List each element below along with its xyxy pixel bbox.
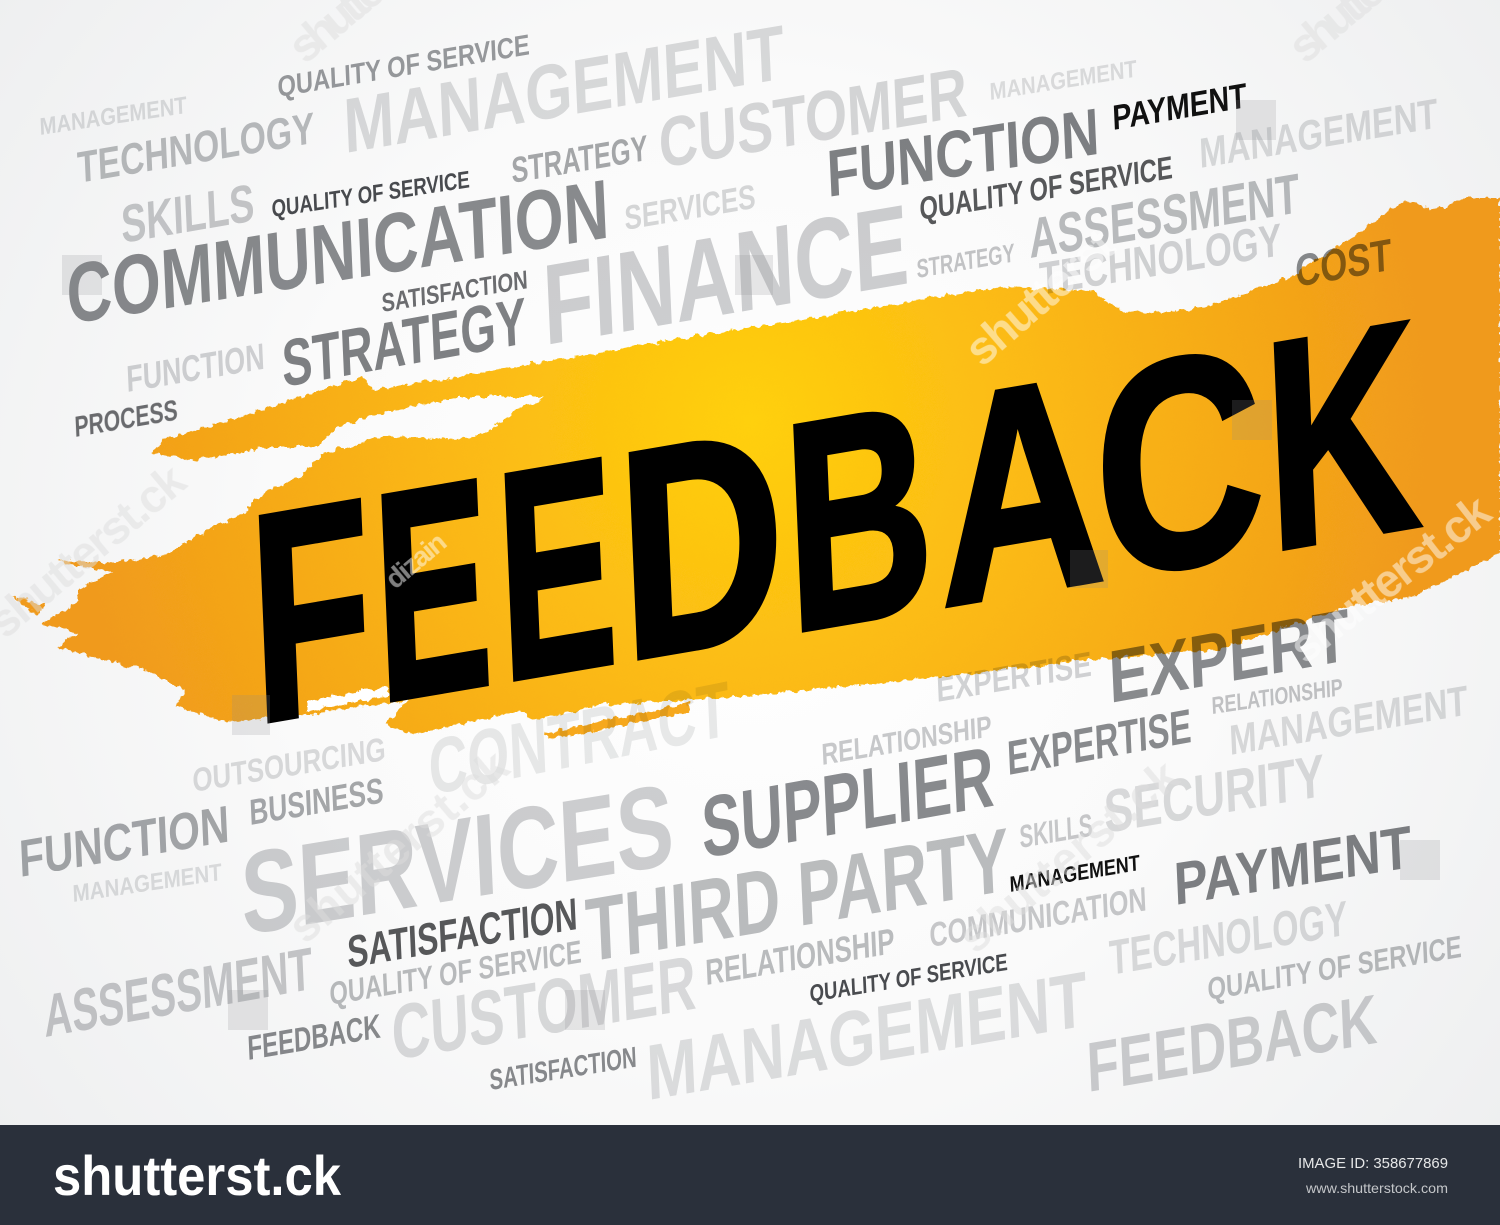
- word: satisfaction: SATISFACTION: [381, 264, 528, 318]
- watermark text: shutterst.ck: [278, 739, 519, 953]
- word: strategy large: STRATEGY: [280, 283, 528, 401]
- word: finance: FINANCE: [540, 181, 911, 370]
- main title: FEEDBACK: [245, 258, 1425, 787]
- main title: FEEDBACK: E: [492, 394, 622, 745]
- main title: FEEDBACK: D: [613, 366, 791, 724]
- word: communication: COMMUNICATION: [65, 161, 611, 342]
- word: function: FUNCTION: [825, 93, 1101, 211]
- word: management: MANAGEMENT: [39, 92, 188, 141]
- word: feedback lower right: FEEDBACK: [1085, 980, 1379, 1107]
- word: security: SECURITY: [1103, 742, 1326, 846]
- word: management dark: MANAGEMENT: [1009, 850, 1141, 897]
- word: payment: PAYMENT: [1112, 76, 1247, 138]
- word: skills: SKILLS: [120, 173, 256, 255]
- word: cost: COST: [1294, 229, 1392, 297]
- word: quality of service lower: QUALITY OF SERVICE: [329, 933, 582, 1012]
- watermark text: dizain: [379, 526, 452, 595]
- footer image id: IMAGE ID: 358677869: [1298, 1155, 1448, 1172]
- word: relationship lower: RELATIONSHIP: [705, 920, 895, 993]
- main title: FEEDBACK: A: [931, 311, 1110, 670]
- word: function left: FUNCTION: [126, 336, 265, 400]
- watermark text: shutterst.ck: [1279, 484, 1500, 673]
- word: services large: SERVICES: [238, 759, 676, 960]
- word: satisfaction dark: SATISFACTION: [346, 888, 578, 978]
- word: feedback small: FEEDBACK: [247, 1007, 382, 1068]
- word: technology: TECHNOLOGY: [76, 104, 315, 193]
- word: customer lower: CUSTOMER: [390, 939, 698, 1077]
- watermark stamps: [62, 100, 1440, 1030]
- word: technology right: TECHNOLOGY: [1038, 213, 1282, 305]
- word: technology lower: TECHNOLOGY: [1108, 892, 1348, 986]
- word cloud: upper words: [39, 9, 1439, 444]
- word: process: PROCESS: [74, 394, 178, 444]
- main title: FEEDBACK: F: [245, 436, 378, 787]
- word: third party: THIRD PARTY: [583, 810, 1011, 982]
- word: quality of service dark: QUALITY OF SERVICE: [271, 166, 470, 223]
- word: quality of service: QUALITY OF SERVICE: [277, 29, 530, 104]
- word: strategy small: STRATEGY: [916, 237, 1015, 284]
- watermark text: shutterst.ck: [948, 749, 1189, 963]
- word: customer: CUSTOMER: [657, 53, 969, 183]
- main title: FEEDBACK: C: [1089, 284, 1270, 643]
- orange brush stroke: [12, 197, 1500, 740]
- watermark text: shutterst: [954, 218, 1124, 376]
- footer bar: [0, 1125, 1500, 1225]
- word: skills small: SKILLS: [1019, 807, 1093, 855]
- word: communication small: COMMUNICATION: [929, 880, 1147, 955]
- word: quality of service dark lower: QUALITY OF SERVICE: [809, 949, 1008, 1008]
- word: management lower left: MANAGEMENT: [72, 859, 223, 908]
- main title: FEEDBACK: B: [779, 340, 939, 696]
- word: outsourcing: OUTSOURCING: [192, 730, 386, 799]
- word: function lower left: FUNCTION: [18, 795, 231, 889]
- footer logo: shutterst.ck: [53, 1144, 342, 1207]
- footer url: www.shutterstock.com: [1305, 1180, 1448, 1196]
- word: payment lower: PAYMENT: [1173, 813, 1413, 918]
- word: management upper right: MANAGEMENT: [989, 55, 1138, 106]
- word: management far right: MANAGEMENT: [1198, 89, 1439, 177]
- word: relationship: RELATIONSHIP: [821, 710, 992, 772]
- word: quality of service right: QUALITY OF SERVICE: [919, 149, 1173, 227]
- main title: FEEDBACK: K: [1259, 258, 1425, 614]
- main title: FEEDBACK: E: [369, 416, 497, 765]
- word: assessment lower: ASSESSMENT: [43, 935, 314, 1050]
- word: satisfaction bottom: SATISFACTION: [489, 1041, 637, 1097]
- word: business: BUSINESS: [249, 769, 384, 833]
- word: strategy: STRATEGY: [511, 127, 648, 191]
- word cloud: lower words: [18, 593, 1469, 1117]
- word: relationship right: RELATIONSHIP: [1211, 674, 1343, 720]
- word: management bottom: MANAGEMENT: [645, 954, 1089, 1117]
- word: expert: EXPERT: [1107, 593, 1351, 719]
- word: expertise faint: EXPERTISE: [936, 645, 1092, 710]
- word: services: SERVICES: [624, 178, 756, 238]
- word: assessment: ASSESSMENT: [1028, 161, 1301, 270]
- word: supplier: SUPPLIER: [700, 728, 996, 877]
- word: contract: CONTRACT: [427, 664, 731, 812]
- watermark text: [0, 0, 1500, 963]
- word: expertise: EXPERTISE: [1006, 700, 1192, 786]
